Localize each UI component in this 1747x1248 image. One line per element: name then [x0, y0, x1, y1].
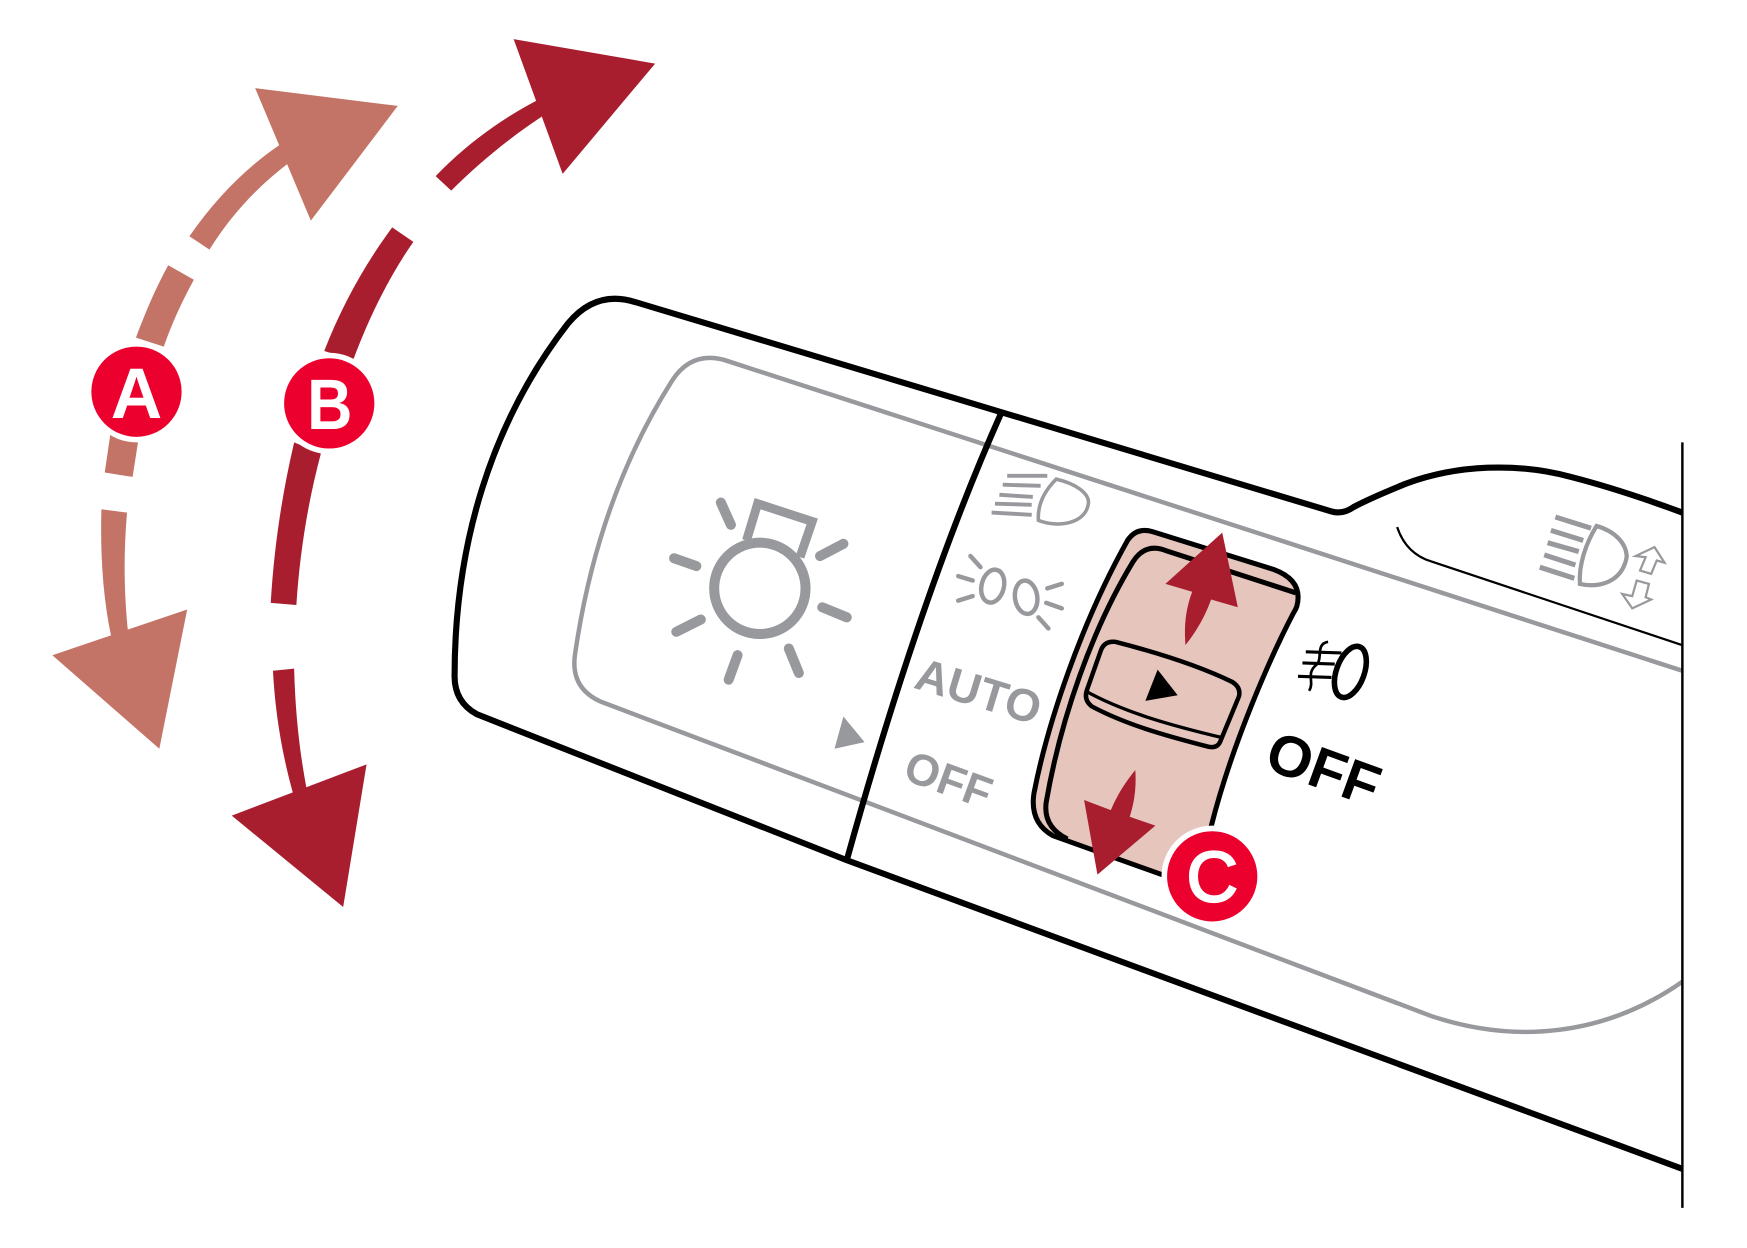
arrow B: rotation arc [232, 39, 655, 907]
marker triangle black [1145, 670, 1178, 701]
icon: parking lights grey [958, 556, 1062, 628]
arrow: switch up [1165, 533, 1238, 645]
label: OFF black: OFF [1258, 720, 1389, 820]
stalk inner contour [574, 358, 1682, 1032]
badge A [89, 344, 184, 440]
icon: fog light [1298, 642, 1373, 702]
badge B: B [307, 365, 352, 445]
badge A: A [111, 354, 162, 434]
arrow A: rotation arc [52, 88, 398, 749]
icon: light bulb position [674, 503, 847, 680]
marker triangle grey [835, 716, 865, 749]
label: AUTO: AUTO [910, 648, 1047, 735]
badge C: C [1186, 837, 1238, 917]
label: OFF grey: OFF [898, 742, 998, 819]
badge B [281, 355, 377, 451]
switch ring C [1033, 530, 1298, 880]
icon: high beam grey [992, 476, 1089, 524]
arrow: switch down [1084, 770, 1155, 875]
stalk outline [455, 299, 1682, 1169]
thin groove line [1397, 527, 1682, 645]
icon: headlamp levelling [1540, 517, 1665, 608]
collar divider [847, 415, 1001, 860]
end vertical line [1681, 442, 1683, 1208]
switch knob [1085, 642, 1239, 747]
badge C [1164, 828, 1260, 924]
